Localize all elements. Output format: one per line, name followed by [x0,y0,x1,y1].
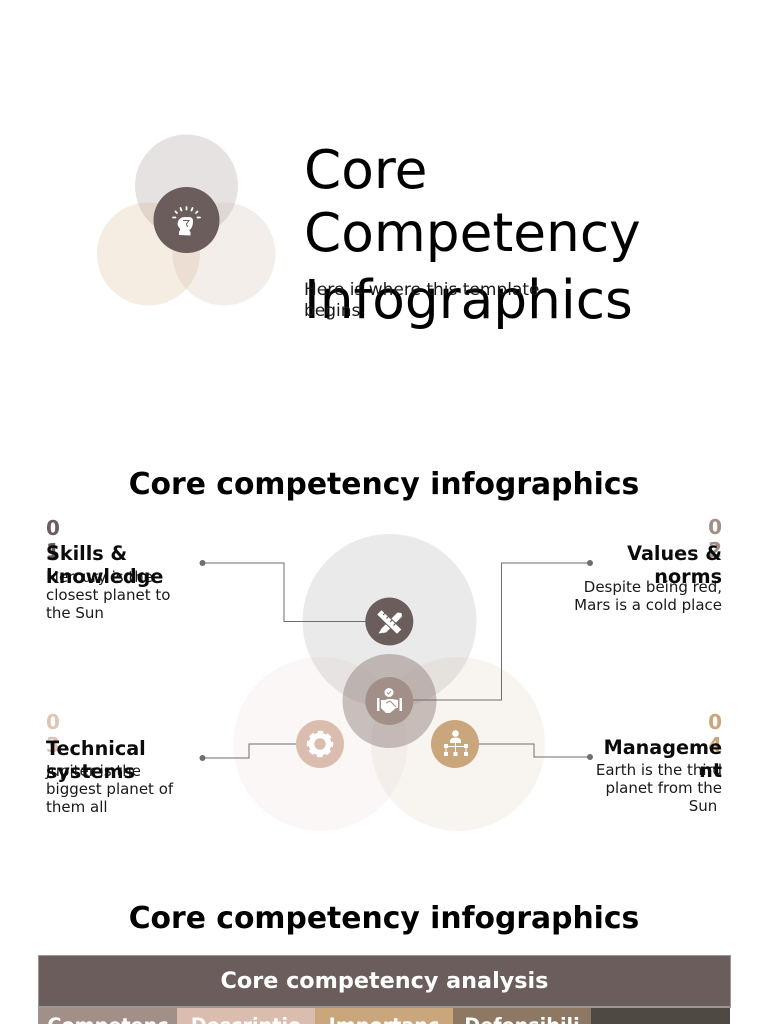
block: item 04: nt [699,759,722,782]
venn diagram with connectors [200,534,593,831]
block: item 01: knowledge [46,565,163,588]
subtitle [304,280,540,320]
icon: handshake [365,677,413,725]
title [304,139,641,330]
icon: gear [296,720,344,768]
title: Infographics [304,268,633,330]
block: item 03: Jupiter is the [46,762,141,780]
title: Competency [304,202,641,264]
block: item 02: 2 [708,538,722,562]
block: item 03: Technical [46,737,146,760]
heading: section 2: Core competency infographics [129,900,639,936]
block: item 02: 0 [708,515,722,539]
block: item 04: Manageme [604,736,722,759]
block: item 04: Earth is the third [596,761,722,779]
block: item 04: 0 [708,710,722,734]
subtitle: Here is where this template [304,280,540,300]
block: item 02 [574,515,722,614]
block: item 01: Skills & [46,542,127,565]
block: item 02: Values & [627,542,722,565]
table: core competency analysis [38,955,731,1024]
block: item 04: planet from the [605,779,722,797]
block: item 04: Sun [689,797,717,815]
icon: ruler and pencil [365,598,413,646]
icon: org chart [431,720,479,768]
block: item 03 [45,710,174,816]
block: item 01: 0 [46,516,60,540]
block: item 03: 3 [46,733,60,757]
block: item 01: the Sun [46,604,104,622]
table title: Core competency analysis [221,968,548,994]
block: item 03: biggest planet of [46,780,173,798]
block: item 02: norms [654,565,722,588]
block: item 01 [46,516,170,622]
block: item 01: closest planet to [46,586,170,604]
heading: section 1: Core competency infographics [129,467,639,502]
subtitle: begins [304,300,360,320]
block: item 03: 0 [46,710,60,734]
table title [38,955,731,1007]
block: item 02: Despite being red, [584,578,722,596]
block: item 04: 4 [708,733,722,757]
block: item 01: 1 [46,539,60,563]
block: item 03: systems [46,760,135,783]
title: Core [304,139,427,201]
column headers [39,1008,731,1024]
block: item 02: Mars is a cold place [574,596,722,614]
icon: three overlapping circles with fist [97,134,276,306]
block: item 04 [596,710,722,815]
block: item 03: them all [46,798,108,816]
block: item 01: Mercury is the [46,568,153,586]
